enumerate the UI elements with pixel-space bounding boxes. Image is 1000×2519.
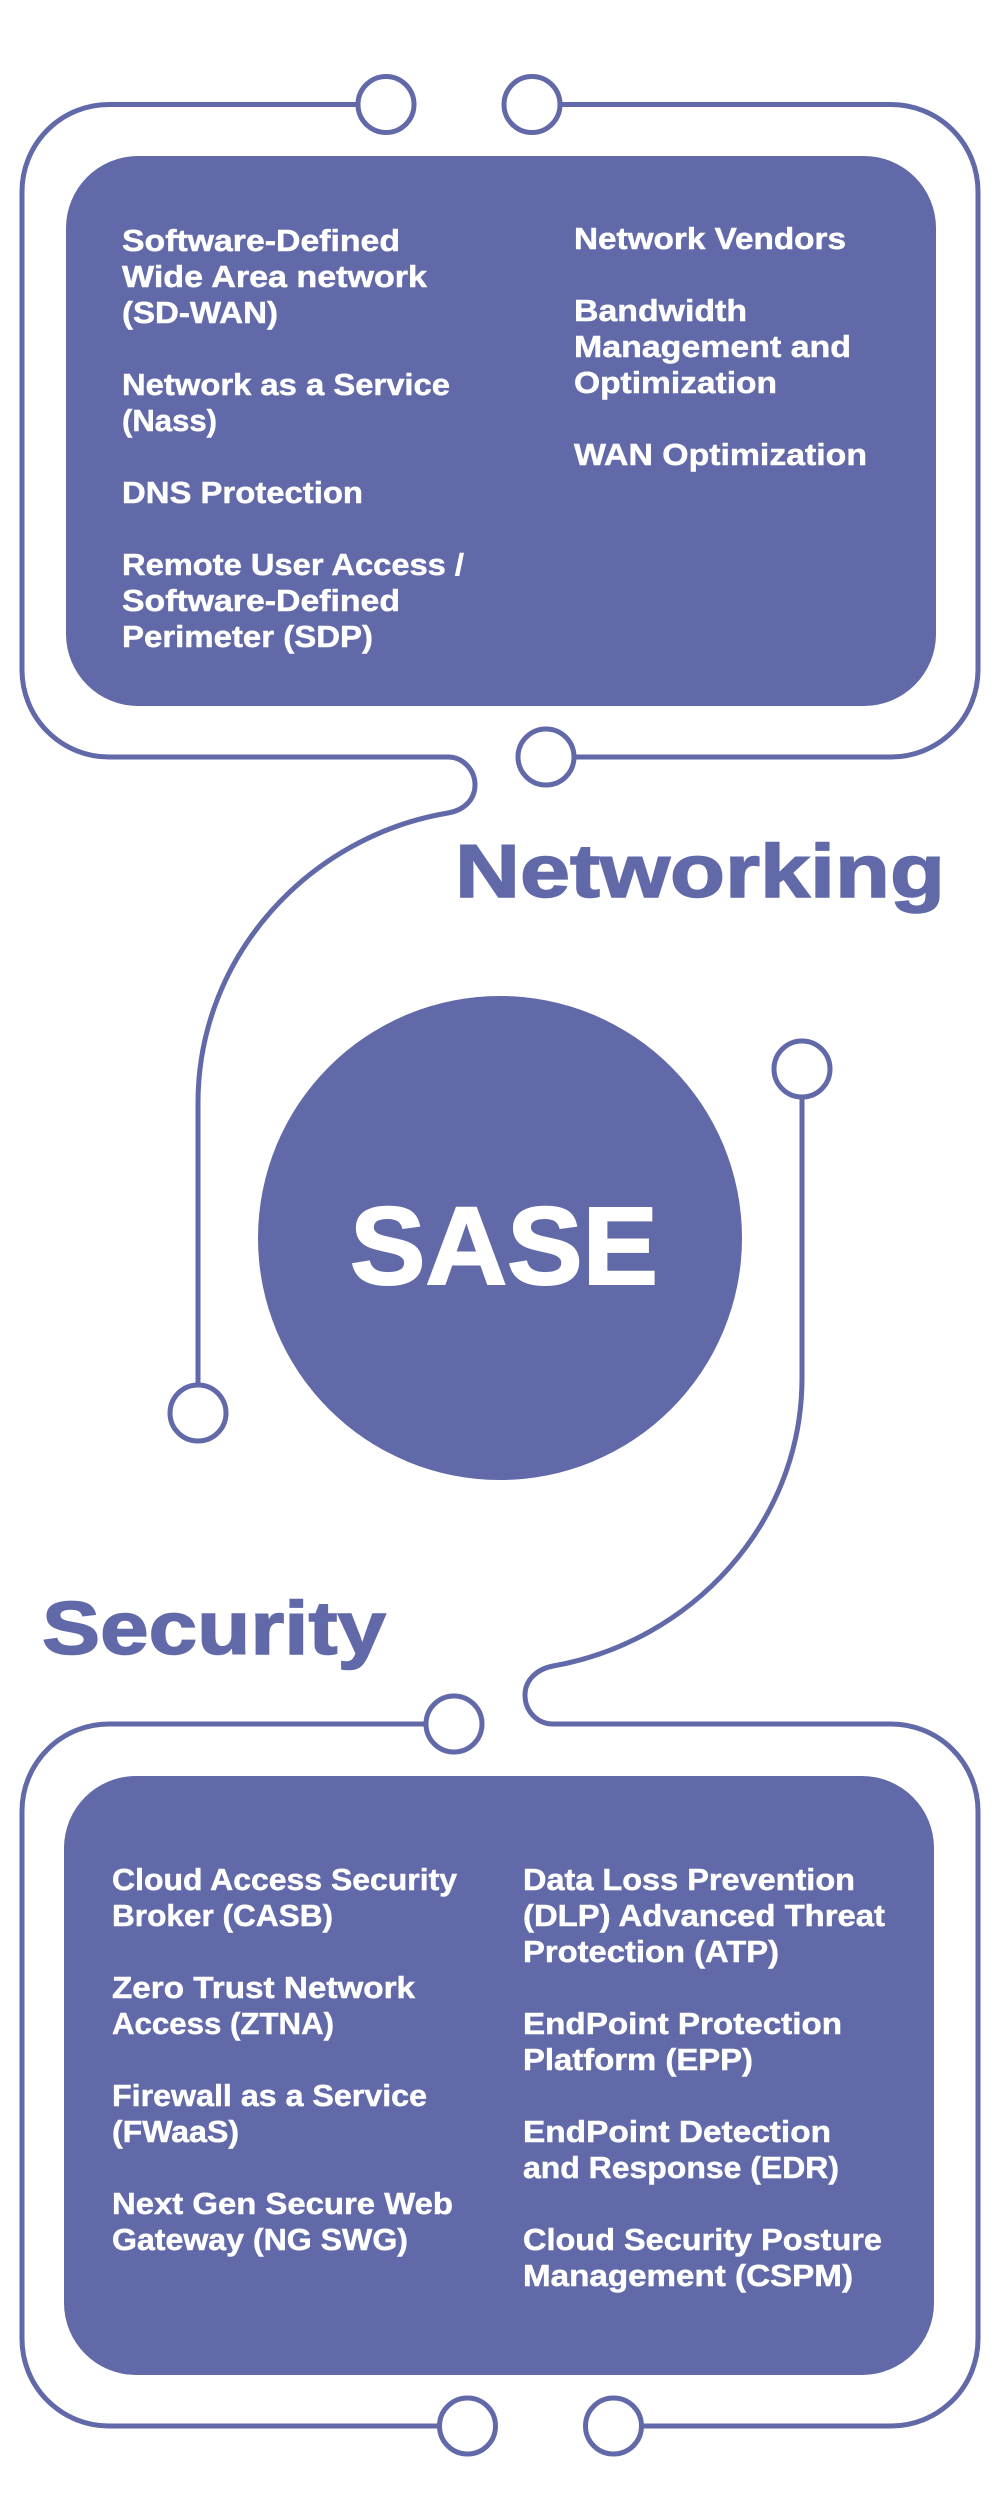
item: FWaaS: Firewall as a Service [112,2078,427,2113]
panel: security [64,1776,934,2375]
item: EDR: EndPoint Detection [523,2114,831,2149]
item: FWaaS: (FWaaS) [112,2114,239,2149]
item: ZTNA: Access (ZTNA) [112,2006,334,2041]
item: ZTNA [112,1970,416,2041]
item: NG SWG: Next Gen Secure Web [112,2186,453,2221]
item: NG SWG: Gateway (NG SWG) [112,2222,408,2257]
item: EPP: EndPoint Protection [523,2006,842,2041]
central circle: SASE [258,996,742,1480]
node: security top [426,1696,482,1752]
central circle: SASE: SASE [350,1185,658,1308]
item: WAN Optimization: WAN Optimization [574,437,867,472]
item: DLP and ATP: (DLP) Advanced Threat [523,1898,885,1933]
item: Network Vendors: Network Vendors [574,221,846,256]
item: DNS Protection: DNS Protection [122,475,363,510]
item: CASB: Broker (CASB) [112,1898,333,1933]
item: CSPM: Cloud Security Posture [523,2222,882,2257]
item: DLP and ATP: Data Loss Prevention [523,1862,855,1897]
connector: security outline and link to SASE [22,1097,978,2426]
item: CSPM: Management (CSPM) [523,2258,853,2293]
security list: left column [112,1862,458,2257]
item: NG SWG [112,2186,453,2257]
item: CASB [112,1862,458,1933]
item: CSPM [523,2222,882,2293]
item: EPP: Platform (EPP) [523,2042,753,2077]
node: networking link end [170,1385,226,1441]
item: SD-WAN: Wide Area network [122,259,428,294]
item: Bandwidth Management: Management and [574,329,851,364]
item: DLP and ATP: Protection (ATP) [523,1934,779,1969]
item: Bandwidth Management [574,293,851,400]
node: networking top left [358,76,414,132]
node: networking bottom [518,729,574,785]
item: DLP and ATP [523,1862,885,1969]
item: Bandwidth Management: Bandwidth [574,293,747,328]
node: security bottom right [586,2398,642,2454]
node: security link end [774,1041,830,1097]
node: security bottom left [440,2398,496,2454]
item: Network as a Service [122,367,450,438]
item: FWaaS [112,2078,427,2149]
security list: right column [523,1862,885,2293]
item: CASB: Cloud Access Security [112,1862,458,1897]
item: Network as a Service: Network as a Service [122,367,450,402]
heading: Networking: Networking [455,829,945,913]
item: SD-WAN: (SD-WAN) [122,295,278,330]
item: SD-WAN [122,223,428,330]
item: Remote User Access: Perimeter (SDP) [122,619,373,654]
item: EDR [523,2114,839,2185]
item: ZTNA: Zero Trust Network [112,1970,416,2005]
networking list: left column [122,223,464,654]
heading: Security: Security [42,1586,386,1670]
item: Network as a Service: (Nass) [122,403,217,438]
item: EDR: and Response (EDR) [523,2150,839,2185]
panel: networking [66,156,936,706]
item: Remote User Access [122,547,464,654]
networking list: right column [574,221,867,472]
item: EPP [523,2006,842,2077]
node: networking top right [504,76,560,132]
item: Bandwidth Management: Optimization [574,365,777,400]
connector: networking outline and link to SASE [22,104,978,1384]
item: Remote User Access: Remote User Access / [122,547,464,582]
item: SD-WAN: Software-Defined [122,223,400,258]
item: Remote User Access: Software-Defined [122,583,400,618]
